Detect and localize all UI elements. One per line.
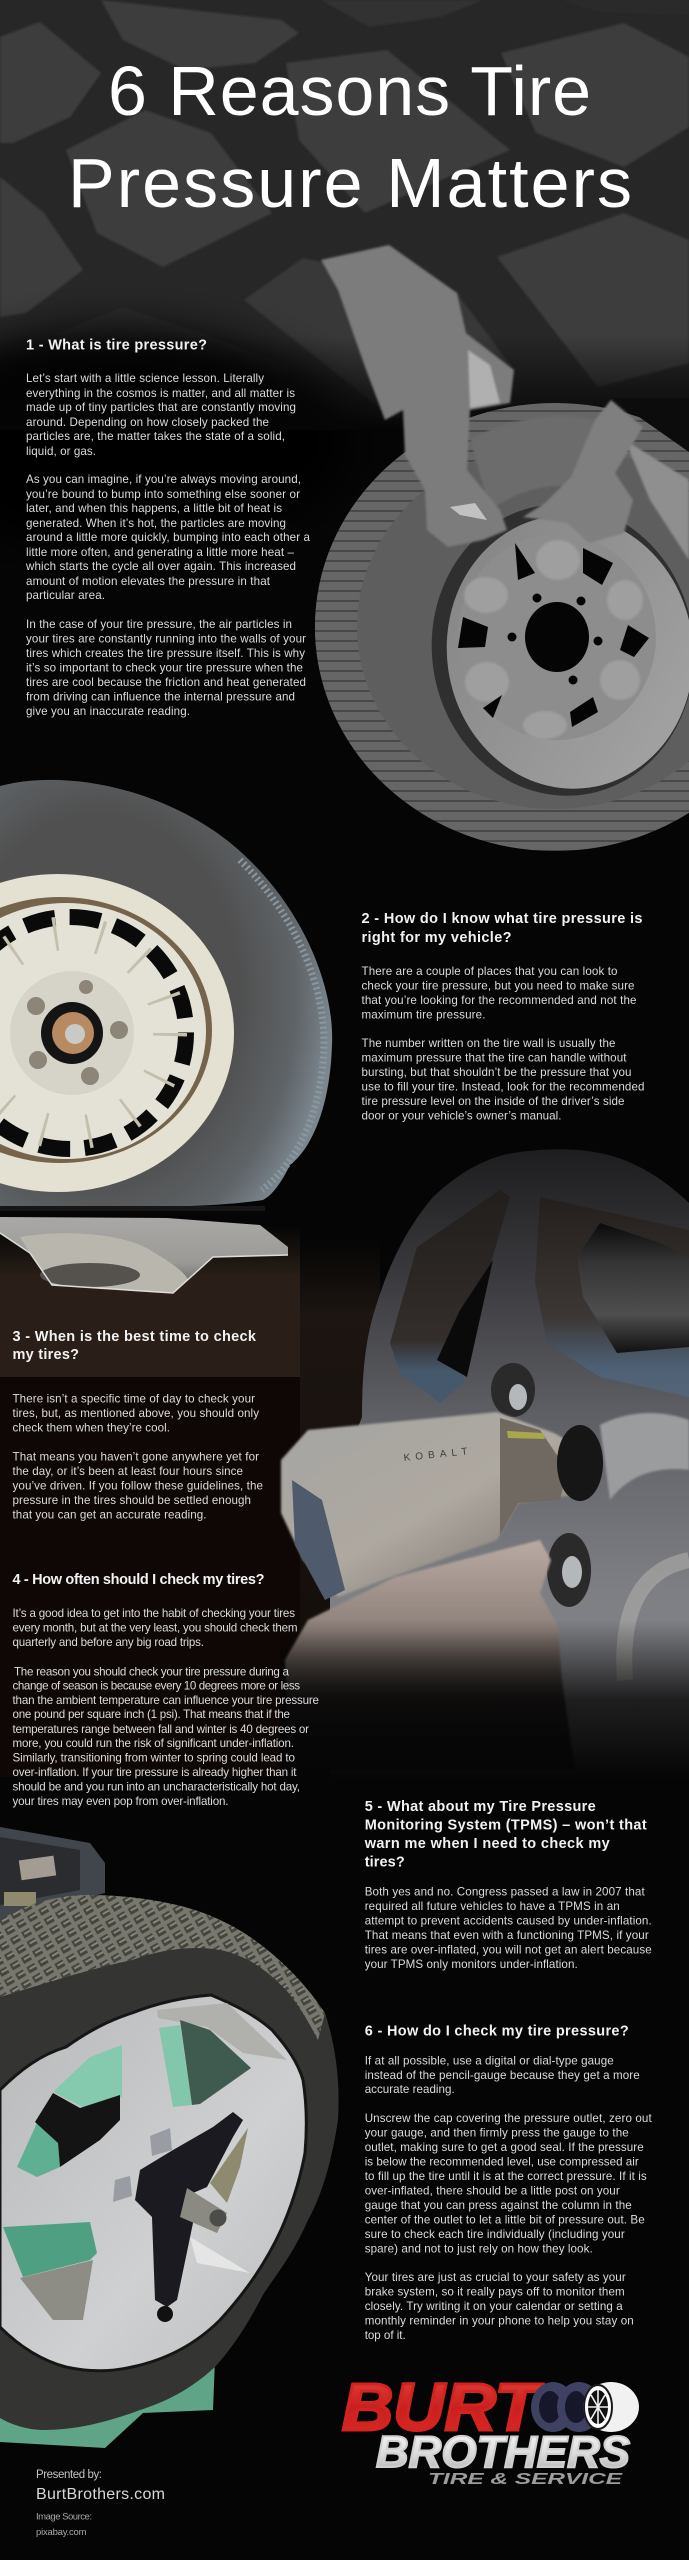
balancer arm: [135, 2112, 243, 2307]
photo: hands repairing tire: [315, 245, 689, 850]
body text 1: [25, 372, 311, 718]
lug nuts: [27, 980, 128, 1085]
body text 2: There are a couple of places that you can look to: [362, 965, 618, 978]
body text 6: to fill up the tire until it is at the correct pressure. If it is: [365, 2170, 647, 2183]
reflection of flat tire: [0, 1217, 288, 1293]
wrench socket: [557, 1425, 603, 1501]
body text 2: maximum pressure that the tire can handle without: [362, 1052, 627, 1064]
section 5: TPMS: [364, 1799, 652, 1971]
heading 5: [364, 1799, 647, 1870]
body text 6: [365, 2054, 652, 2342]
section 6: how to check: [365, 2024, 652, 2342]
body text 5: your TPMS only monitors under-inflation.: [365, 1958, 578, 1971]
body text 5: required all future vehicles to have a TPMS in an: [365, 1900, 620, 1913]
body text 6: If at all possible, use a digital or dial-type gauge: [365, 2054, 614, 2067]
left window black wedge: [437, 1260, 493, 1377]
body text 1: particles are, the matter takes the state of a solid,: [26, 430, 285, 443]
wrench tool in hand: [450, 503, 487, 520]
photo: wheel on balancer: [0, 1827, 339, 2448]
heading 5: warn me when I need to check my: [364, 1836, 610, 1852]
flat tire body: [0, 780, 332, 1207]
body text 3: the day, or it’s been at least four hours since: [12, 1465, 243, 1478]
cream rim: [0, 874, 234, 1192]
body text 1: around. Depending on how closely packed the: [26, 416, 269, 429]
corner cut-out: [612, 398, 689, 452]
title: [68, 52, 632, 222]
tire tread: [0, 1895, 325, 2040]
wrench body: [281, 1412, 602, 1597]
body text 6: spare) and not to just rely on how they look.: [365, 2243, 593, 2256]
body text 2: that you’re looking for the recommended and not the: [362, 994, 636, 1007]
upper inner tire: [470, 416, 620, 510]
photo: flat tire: [0, 780, 332, 1293]
title: 6 Reasons Tire: [108, 52, 591, 130]
heading 4: 4 - How often should I check my tires?: [12, 1572, 265, 1588]
body text 6: your gauge, and then firmly press the gauge to the: [365, 2127, 629, 2140]
body text 4: over-inflation. If your tire pressure is already higher than it: [12, 1766, 297, 1779]
section 3: best time to check: [12, 1329, 263, 1522]
body text 5: attempt to prevent accidents caused by under-inflation.: [365, 1914, 652, 1928]
body text 3: That means you haven’t gone anywhere yet for: [12, 1451, 259, 1464]
rim slots: [0, 917, 186, 1149]
panel: hero tire tread background: [0, 0, 689, 550]
body text 1: made up of tiny particles that are constantly moving: [26, 401, 296, 414]
footer credits: Presented by:: [36, 2469, 102, 2481]
threaded bolt: [180, 2188, 227, 2233]
body text 3: tires, but, as mentioned above, you should only: [12, 1407, 259, 1420]
body text 1: little more often, and generating a little more heat –: [26, 546, 295, 559]
wrench lever: [292, 1480, 345, 1600]
body text 2: [362, 965, 644, 1122]
dark ring behind rim: [413, 487, 689, 813]
upper right tire patch: [625, 440, 689, 560]
wheel body: [330, 1149, 689, 1780]
body text 4: than the ambient temperature can influence your tire pressure: [12, 1694, 319, 1707]
body text 6: gauge that you can press against the column in the: [365, 2199, 632, 2212]
pale spoke patches: [464, 540, 643, 739]
balancer machine: [0, 1827, 105, 1920]
green base: [0, 2360, 215, 2448]
body text 4: every month, but at the very least, you should check them: [12, 1622, 298, 1634]
arm: left with sleeve: [321, 245, 514, 547]
body text 6: sure to check each tire individually (including your: [365, 2228, 625, 2241]
sleeve highlight: [468, 350, 500, 408]
arm: right: [523, 400, 643, 543]
logo tires: [531, 2382, 639, 2432]
body text 1: Let’s start with a little science lesson. Literally: [26, 372, 264, 385]
hub: [10, 971, 134, 1095]
body text 4: should be and you run into an uncharacteristically hot day,: [12, 1780, 300, 1794]
body text 1: As you can imagine, if you’re always moving around,: [26, 473, 301, 486]
body text 6: instead of the pencil-gauge because they get a more: [365, 2069, 640, 2082]
rim face: [0, 1995, 306, 2371]
body text 6: monthly reminder in your phone to help you stay on: [365, 2314, 634, 2328]
reflected rim dark: [40, 1263, 140, 1287]
right window hole: [577, 1223, 689, 1353]
body text 4: more, you could run the risk of significant under-inflation.: [12, 1737, 294, 1750]
body text 6: Your tires are just as crucial to your safety as your: [365, 2271, 626, 2284]
heading 5: Monitoring System (TPMS) – won’t that: [365, 1818, 647, 1834]
body text 2: door or your vehicle’s owner’s manual.: [362, 1110, 562, 1122]
body text 1: everything in the cosmos is matter, and all matter is: [26, 387, 295, 400]
body text 4: your tires may even pop from over-inflation.: [12, 1795, 228, 1808]
body text 3: you’ve driven. If you follow these guidelines, the: [12, 1480, 263, 1492]
body text 1: liquid, or gas.: [26, 445, 96, 458]
tire outer: [0, 1895, 339, 2430]
body text 1: amount of motion elevates the pressure in that: [26, 575, 271, 588]
photo: impact wrench on wheel: [0, 1149, 689, 1780]
body text 1: tires are cool because the friction and heat generated: [26, 676, 306, 689]
body text 1: you’re bound to bump into something else sooner or: [26, 488, 300, 501]
body text 6: Unscrew the cap covering the pressure outlet, zero out: [365, 2112, 652, 2125]
brown shop wall: [0, 1225, 300, 1377]
body text 3: [12, 1393, 263, 1522]
logo wordmark Burt: BURT: [342, 2370, 543, 2445]
body text 1: from driving can influence the internal pressure and: [26, 690, 295, 704]
body text 5: tires are over-inflated, you will not get an alert because: [365, 1944, 652, 1956]
wheel rim: [429, 499, 689, 805]
body text 4: one pound per square inch (1 psi). That means that if the: [12, 1708, 290, 1721]
body text 3: pressure in the tires should be settled enough: [12, 1494, 251, 1507]
body text 6: brake system, so it really pays off to monitor them: [365, 2286, 625, 2298]
tread band: [336, 424, 689, 830]
section 4: how often to check: [12, 1572, 319, 1808]
logo: Burt Brothers: [342, 2370, 639, 2488]
wrench rear section: [500, 1418, 567, 1535]
body text 6: center of the outlet to let a little bit of pressure out. Be: [365, 2214, 645, 2227]
heading 3: [12, 1329, 257, 1363]
heading 1: 1 - What is tire pressure?: [26, 338, 207, 354]
wheel bottom fade: [280, 1620, 689, 1780]
body text 2: tire pressure level on the inside of the driver’s side: [362, 1095, 624, 1108]
tire bottom crack: [0, 1206, 265, 1211]
body text 1: around a little more quickly, bumping into each other a: [26, 531, 311, 544]
body text 6: accurate reading.: [365, 2083, 455, 2096]
body text 5: [365, 1886, 652, 1971]
body text 6: is below the recommended level, use compressed air: [365, 2156, 639, 2169]
light spoke right of socket: [600, 1413, 689, 1500]
wrench sticker: [507, 1431, 545, 1439]
heading 6: 6 - How do I check my tire pressure?: [365, 2024, 629, 2040]
heading 2: [362, 911, 642, 946]
heading 3: my tires?: [12, 1347, 79, 1363]
tire body: [315, 404, 689, 850]
footer credits: Image Source:: [36, 2512, 92, 2522]
body text 2: use to fill your tire. Instead, look for the recommended: [362, 1080, 644, 1094]
heading 5: 5 - What about my Tire Pressure: [365, 1799, 596, 1815]
section 2: right pressure: [362, 911, 644, 1122]
rim spokes: [0, 933, 170, 1133]
logo tagline: TIRE & SERVICE: [428, 2471, 624, 2488]
body text 4: change of season is because every 10 degrees more or less: [12, 1680, 300, 1692]
body text 4: Similarly, transitioning from winter to spring could lead to: [12, 1752, 295, 1764]
body text 1: In the case of your tire pressure, the air particles in: [26, 618, 292, 631]
section 1: what is tire pressure: [25, 338, 311, 718]
body text 1: which starts the cycle all over again. This increased: [25, 560, 296, 573]
body text 2: bursting, but that shouldn’t be the pressure that you: [362, 1066, 632, 1079]
wheel windows: [458, 543, 649, 727]
right wheel window: [535, 1197, 689, 1397]
heading 3: 3 - When is the best time to check: [12, 1329, 257, 1345]
heading 2: 2 - How do I know what tire pressure is: [362, 911, 642, 927]
body text 1: generated. When it’s hot, the particles are moving: [26, 517, 286, 530]
body text 1: it’s so important to check your tire pressure when the: [26, 662, 303, 674]
rim windows: [3, 2003, 287, 2320]
body text 1: give you an inaccurate reading.: [26, 705, 190, 718]
body text 2: maximum tire pressure.: [362, 1008, 486, 1022]
body text 2: check your tire pressure, but you need to make sure: [362, 980, 634, 992]
left wheel window: [390, 1190, 510, 1403]
footer credits: pixabay.com: [36, 2527, 87, 2538]
logo wordmark Brothers: BROTHERS: [376, 2428, 630, 2477]
body text 4: [12, 1607, 319, 1808]
dark shop lower: [0, 1377, 300, 1777]
body text 4: The reason you should check your tire pressure during a: [14, 1665, 290, 1678]
body text 4: temperatures range between fall and winter is 40 degrees or: [12, 1723, 309, 1736]
body text 4: quarterly and before any big road trips.: [12, 1636, 204, 1649]
heading 2: right for my vehicle?: [362, 930, 512, 946]
title: Pressure Matters: [68, 144, 632, 222]
body text 3: check them when they’re cool.: [12, 1422, 170, 1434]
tire shadow: [300, 1240, 380, 1740]
body text 3: that you can get an accurate reading.: [12, 1508, 206, 1522]
footer credits: BurtBrothers.com: [36, 2486, 165, 2503]
spoke arc: [624, 1560, 689, 1680]
body text 2: The number written on the tire wall is usually the: [362, 1037, 616, 1050]
body text 6: outlet, making sure to get a good seal. If the pressure: [365, 2141, 644, 2154]
body text 1: your tires are constantly running into the walls of your: [26, 632, 306, 646]
lug nut bottom: [547, 1533, 591, 1607]
body text 6: over-inflated, there should be a little post on your: [365, 2185, 620, 2198]
body text 1: tires which creates the tire pressure itself. This is why: [26, 647, 305, 660]
body text 6: closely. Try writing it on your calendar or setting a: [365, 2300, 623, 2313]
reflected rim: [20, 1233, 188, 1293]
hand: [285, 1540, 575, 1770]
body text 1: particular area.: [26, 589, 105, 602]
valve stem: [157, 2306, 173, 2322]
body text 5: Both yes and no. Congress passed a law in 2007 that: [365, 1886, 645, 1899]
wrench brand: KOBALT: [403, 1446, 468, 1464]
lug nut top: [491, 1363, 535, 1417]
footer credits: [36, 2469, 165, 2538]
tire tread edge: [240, 860, 324, 1190]
reflection outline: [0, 1233, 288, 1293]
heading 5: tires?: [365, 1854, 405, 1870]
body text 1: later, and when this happens, a little bit of heat is: [26, 502, 282, 515]
body text 5: That means that even with a functioning TPMS, if your: [365, 1929, 649, 1942]
body text 6: top of it.: [365, 2329, 406, 2342]
body text 4: It’s a good idea to get into the habit of checking your tires: [12, 1607, 295, 1620]
body text 3: There isn’t a specific time of day to check your: [12, 1393, 255, 1406]
